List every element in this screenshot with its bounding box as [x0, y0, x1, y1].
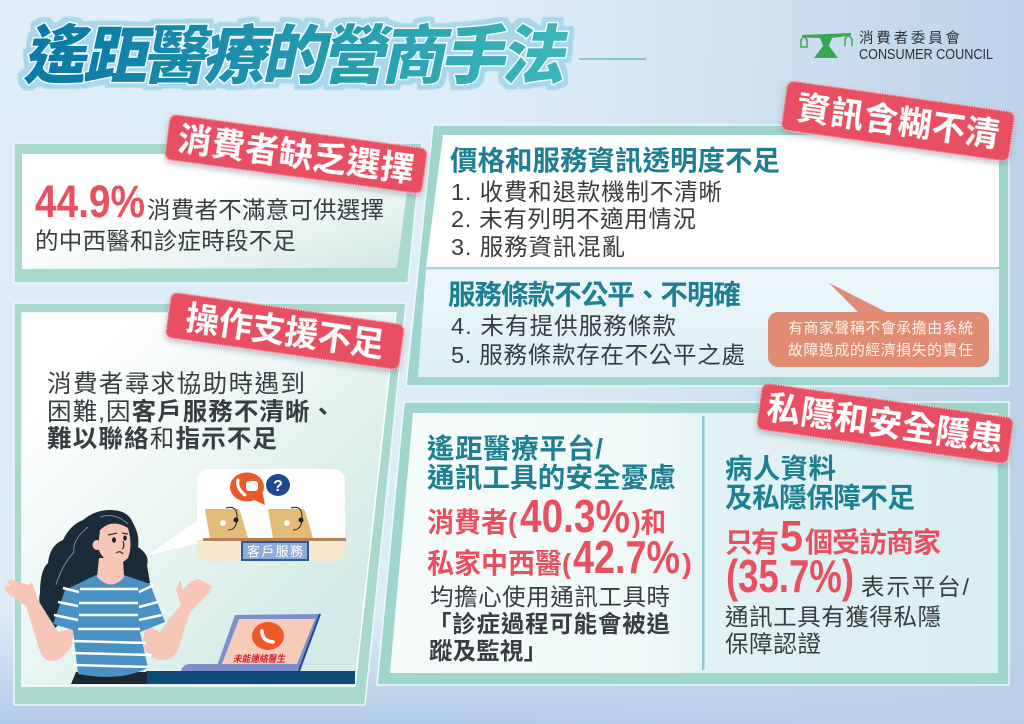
woman illustration: [5, 510, 212, 684]
panel: support: [5, 303, 406, 705]
list 4-5: 5. 服務條款存在不公平之處: [451, 342, 745, 368]
concern text: 蹤及監視」: [429, 638, 547, 664]
shirt: [53, 575, 165, 677]
doctors statistic: 私家中西醫(: [427, 548, 572, 579]
trousers: [71, 672, 147, 684]
icon: phone chat bubble: [230, 472, 265, 505]
left arm: [5, 580, 74, 661]
support text: [47, 370, 335, 453]
merchants statistic: 只有: [725, 527, 779, 558]
lower inner area: [418, 269, 999, 377]
statistic 44.9%: 44.9%: [35, 176, 145, 227]
heading: 通訊工具的安全憂慮: [427, 462, 676, 493]
heading: unfair terms: 服務條款不公平、不明確: [448, 279, 741, 310]
panel: privacy and security: [377, 402, 1009, 685]
callout: 有商家聲稱不會承擔由系統: [788, 320, 973, 337]
agent right: [268, 507, 313, 538]
concern text: 均擔心使用通訊工具時: [430, 584, 670, 610]
counter: [197, 540, 345, 562]
list 1-3: 2. 未有列明不適用情況: [451, 206, 696, 232]
ribbon: insufficient support: 操作支援不足: [183, 300, 386, 365]
panel frame: [377, 402, 1009, 685]
list 4-5: 4. 未有提供服務條款: [451, 313, 676, 339]
left column: [427, 433, 692, 664]
neck: [97, 558, 124, 584]
callout: 故障造成的經濟損失的責任: [788, 341, 973, 359]
merchants statistic: 5: [780, 512, 803, 561]
certification text: 通訊工具有獲得私隱: [725, 604, 941, 630]
support text: 消費者尋求協助時遇到: [47, 370, 305, 398]
panel: unclear information: [406, 125, 1009, 386]
certification text: 保障認證: [725, 631, 821, 657]
concern text: 「診症過程可能會被追: [428, 611, 670, 637]
heading: 遙距醫療平台/: [427, 433, 603, 464]
hair strand: [56, 516, 128, 585]
agent left: [205, 507, 248, 538]
heading: 及私隱保障不足: [725, 482, 915, 513]
icon: question bubble: [266, 474, 290, 496]
panel frame: [14, 303, 406, 705]
heading: price transparency: 價格和服務資訊透明度不足: [450, 145, 780, 176]
doctors statistic: 42.7%: [573, 531, 680, 583]
laptop: [181, 614, 321, 671]
list 1-3: [451, 179, 722, 260]
right column: [725, 453, 969, 657]
logo: Consumer Council: [801, 30, 993, 63]
list 1-3: 1. 收費和退款機制不清晰: [451, 179, 722, 205]
panel frame: [406, 125, 1009, 386]
consumers statistic: 40.3%: [520, 490, 630, 542]
icon: green scales: [801, 33, 852, 58]
left eye: [112, 537, 116, 543]
bubble body: [197, 469, 345, 540]
logo english name: CONSUMER COUNCIL: [859, 47, 993, 63]
panel inner: [390, 413, 998, 673]
ribbon: privacy and security: 私隱和安全隱患: [765, 390, 1005, 459]
ribbon: lack of choice: 消費者缺乏選擇: [175, 121, 416, 190]
upper inner area: [426, 135, 999, 267]
shirt stripes: [54, 585, 162, 667]
phone icon: [252, 622, 284, 650]
face: [98, 523, 130, 564]
icon: question bubble: ?: [273, 478, 283, 495]
panel frame: [14, 143, 422, 283]
ribbon: insufficient support: [165, 292, 405, 370]
right arm: [142, 579, 212, 660]
speech bubble: customer service: [148, 469, 346, 562]
table: [146, 671, 355, 684]
ear: [92, 540, 102, 550]
callout: [768, 283, 989, 367]
concern text: [428, 584, 670, 664]
ribbon: unclear information: 資訊含糊不清: [794, 90, 1001, 155]
consumers statistic: [427, 490, 666, 542]
panel inner: [22, 313, 396, 686]
merchants statistic: [725, 512, 941, 561]
facial features: [108, 533, 128, 554]
text line 1: 消費者不滿意可供選擇: [147, 197, 384, 223]
bubble tail: [148, 520, 204, 555]
list 4-5: [451, 313, 745, 368]
panel: lack of choice: [14, 143, 422, 283]
doctors statistic: [427, 531, 692, 583]
right eye: [123, 535, 127, 541]
certification text: 表示平台/: [861, 574, 969, 600]
title rule: [579, 58, 646, 60]
title: 遙距醫療的營商手法: [20, 20, 576, 92]
desk line: [203, 538, 346, 541]
text line 2: 的中西醫和診症時段不足: [35, 228, 296, 254]
certification text: [725, 574, 969, 657]
logo chinese name: 消費者委員會: [859, 30, 960, 47]
heading: [725, 453, 915, 513]
panel inner: [22, 154, 412, 269]
support text: 困難,因客戶服務不清晰、: [47, 397, 335, 426]
merchants statistic: 個受訪商家: [805, 527, 941, 558]
column divider: [702, 416, 704, 670]
hair: [39, 510, 150, 630]
customer service sign: 客戶服務: [247, 544, 303, 559]
divider: [426, 267, 997, 270]
support text: 難以聯絡和指示不足: [47, 425, 277, 453]
heading: [427, 433, 676, 493]
percentage 35.7%: (35.7%): [726, 550, 854, 602]
consumers statistic: )和: [632, 507, 666, 538]
laptop message: 未能連絡醫生: [233, 653, 286, 665]
consumers statistic: 消費者(: [427, 507, 518, 538]
doctors statistic: ): [682, 548, 692, 579]
heading: 病人資料: [725, 453, 836, 484]
list 1-3: 3. 服務資訊混亂: [451, 234, 625, 260]
